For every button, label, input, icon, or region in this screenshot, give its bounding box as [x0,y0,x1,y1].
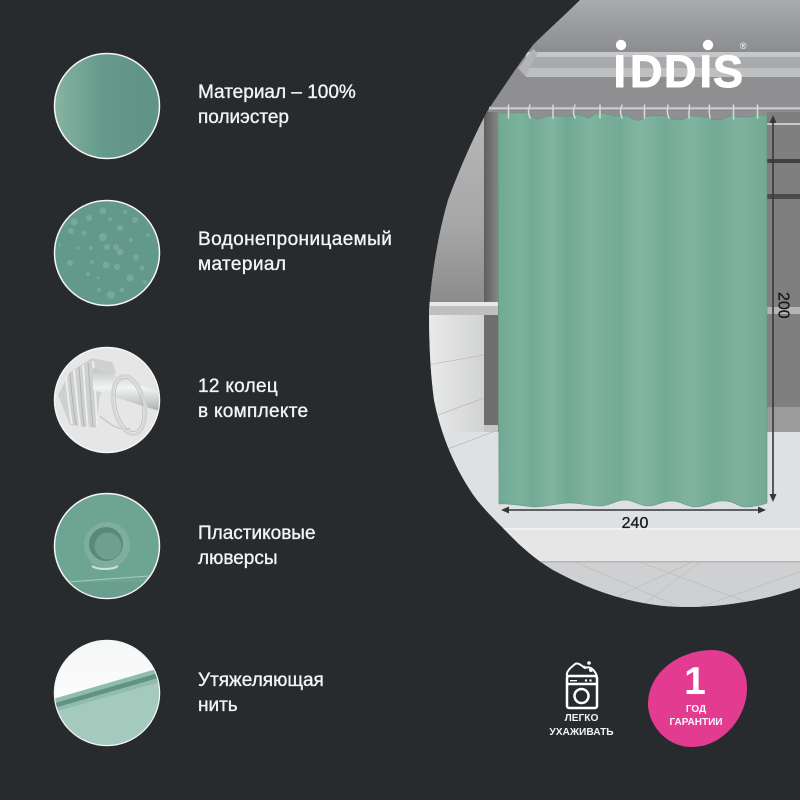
text: grommets: Пластиковые [198,523,316,544]
text: material: полиэстер [198,106,289,128]
dimension arrow: width 240: 240 [622,515,648,532]
text: weighted thread [198,670,324,716]
text: easy care [549,713,614,738]
shower curtain [498,113,767,507]
text: rings: 12 колец [198,376,278,397]
text: easy care: УХАЖИВАТЬ [549,727,614,738]
logo: iddis: ® [740,41,747,51]
text: waterproof: материал [198,254,286,274]
feature photo: rings on rod [54,348,162,452]
bathroom photo [420,0,800,621]
dimension arrow: height 200: 200 [774,292,792,319]
badge text: ГОД [686,704,706,715]
text: weighted thread: Утяжеляющая [198,670,324,691]
text: material: Материал – 100% [198,82,356,103]
dimension arrow: height 200 [770,115,792,502]
badge: pink guarantee blob [648,650,747,747]
text: weighted thread: нить [198,694,238,716]
icon: washing machine [567,661,597,708]
text: rings [198,376,308,422]
text: rings: в комплекте [198,400,308,422]
logo: iddis: D [664,46,696,97]
curtain rings [508,105,758,119]
text: material [198,82,356,128]
logo: iddis: S [713,46,743,97]
text: grommets: люверсы [198,548,278,568]
feature photo: weighted hem [50,640,165,750]
dimension arrow: width 240 [501,506,766,532]
feature photo: material swatch [54,54,160,158]
logo: iddis [614,40,747,97]
curtain rod [489,106,800,110]
feature photo: plastic grommet [54,494,160,602]
logo: iddis: I [700,46,712,97]
logo: iddis: D [630,46,662,97]
text: waterproof [198,229,392,274]
feature photo: water drops [54,200,160,306]
badge text: ГАРАНТИИ [670,717,722,728]
text: waterproof: Водонепроницаемый [198,229,392,250]
text: easy care: ЛЕГКО [565,713,598,724]
logo: iddis: I [614,46,626,97]
badge text [670,704,722,728]
text: grommets [198,523,316,568]
badge number: 1 [684,660,706,703]
